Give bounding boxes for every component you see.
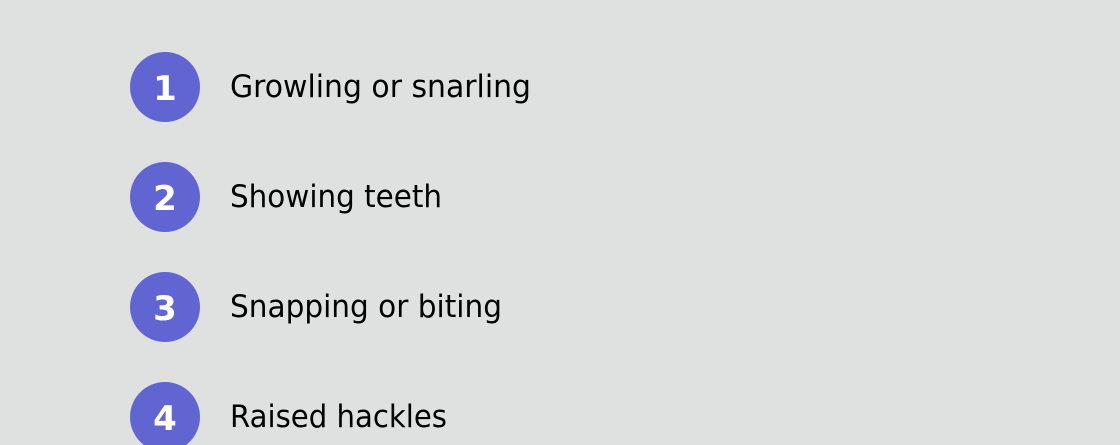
item 2: showing teeth: Showing teeth bbox=[230, 179, 442, 215]
item 3: snapping or biting bbox=[130, 272, 502, 342]
item 2: showing teeth: 2 bbox=[153, 179, 177, 219]
item 2: showing teeth bbox=[130, 162, 442, 232]
item 4: raised hackles: Raised hackles bbox=[230, 399, 447, 435]
item 3: snapping or biting: 3 bbox=[153, 289, 177, 329]
item 1: growling or snarling bbox=[130, 52, 531, 122]
item 3: snapping or biting: Snapping or biting bbox=[230, 289, 502, 325]
item 1: growling or snarling: Growling or snarling bbox=[230, 69, 531, 105]
item 4: raised hackles bbox=[130, 382, 447, 445]
item 1: growling or snarling: 1 bbox=[153, 69, 177, 109]
item 4: raised hackles: 4 bbox=[153, 399, 177, 439]
